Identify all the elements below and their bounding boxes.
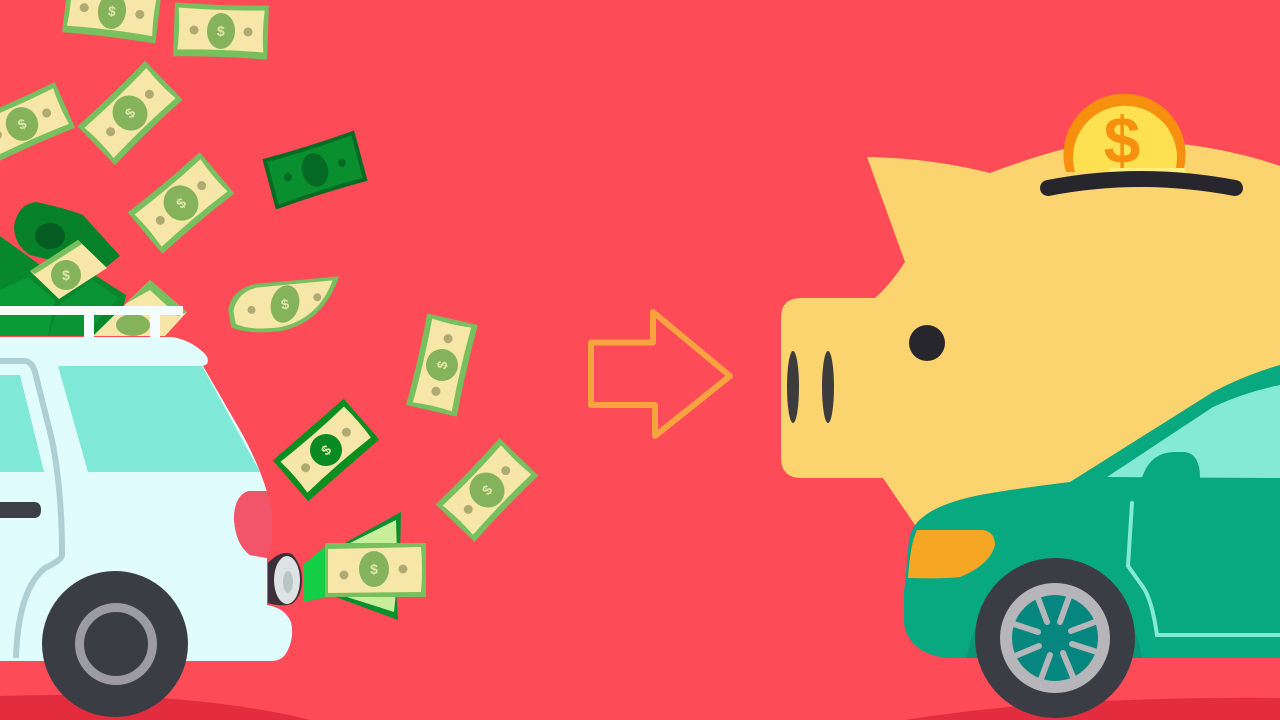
bill 2 bbox=[173, 2, 269, 60]
bill 2: $ bbox=[217, 23, 225, 39]
green car: efficient vehicle bbox=[904, 365, 1280, 718]
bill 8: $ bbox=[433, 359, 451, 371]
bill 3 bbox=[0, 82, 75, 166]
coin bbox=[1064, 94, 1185, 177]
money: flying bills bbox=[0, 0, 538, 542]
bill 1 bbox=[62, 0, 162, 44]
door outline bbox=[0, 361, 62, 658]
dark bills mass bbox=[0, 236, 126, 336]
bill 7: curved bbox=[225, 269, 347, 340]
back bill lower face bbox=[325, 590, 396, 612]
door handle bbox=[0, 502, 41, 518]
green car body bbox=[904, 365, 1280, 658]
money: fan of bills from exhaust bbox=[303, 512, 426, 620]
white car: old vehicle bbox=[0, 337, 302, 717]
light bill behind rack bbox=[93, 280, 187, 336]
nostril left bbox=[787, 351, 799, 423]
piggy bank bbox=[781, 94, 1280, 600]
nostril right bbox=[822, 351, 834, 423]
ground shadow right bbox=[905, 698, 1280, 720]
mirror bbox=[1142, 452, 1200, 478]
side window bbox=[0, 375, 44, 472]
roof rack bbox=[0, 306, 183, 338]
tail light bbox=[234, 491, 272, 558]
money: pile on roof rack bbox=[0, 202, 187, 336]
pile highlight lump left bbox=[0, 277, 55, 336]
back bill upper face bbox=[316, 520, 397, 560]
arrow bbox=[591, 312, 730, 436]
bill 6: dark green bbox=[261, 131, 369, 209]
white car wheel bbox=[42, 571, 188, 717]
bill 9: dark border: $ bbox=[318, 441, 334, 459]
exhaust pipe bbox=[268, 553, 302, 605]
green car wheel bbox=[975, 558, 1135, 718]
bill 9: dark border bbox=[273, 399, 379, 501]
bill 10: $ bbox=[479, 481, 496, 498]
ground shadow left bbox=[0, 695, 310, 720]
white car body bbox=[0, 337, 292, 661]
dark bill top bbox=[14, 202, 120, 272]
light bill in pile bbox=[30, 240, 107, 299]
bill 3: $ bbox=[15, 115, 29, 133]
bill 4: $ bbox=[122, 104, 139, 121]
wheel arch bbox=[967, 579, 1142, 658]
bill 10 bbox=[436, 438, 538, 542]
coin: $ bbox=[1104, 103, 1140, 177]
bill 1: $ bbox=[107, 3, 117, 19]
bill 7: curved: $ bbox=[280, 295, 290, 313]
headlight bbox=[908, 530, 995, 578]
bill 4 bbox=[77, 61, 183, 165]
bill 5: $ bbox=[173, 194, 189, 212]
bill 8 bbox=[406, 313, 478, 417]
pile highlight lump right bbox=[48, 280, 118, 336]
front bill: $ bbox=[370, 561, 378, 577]
light bill in pile: $ bbox=[62, 267, 70, 283]
back bill lower bbox=[303, 585, 398, 620]
bright wedge bbox=[303, 544, 328, 602]
bill 5 bbox=[128, 152, 234, 254]
coin slot bbox=[1048, 179, 1235, 188]
pig body bbox=[781, 141, 1280, 600]
back bill upper bbox=[303, 512, 401, 566]
rear window bbox=[58, 366, 260, 472]
dark bill oval bbox=[35, 223, 65, 249]
eye bbox=[909, 325, 945, 361]
door line bbox=[1128, 503, 1280, 635]
windshield bbox=[1107, 385, 1280, 478]
